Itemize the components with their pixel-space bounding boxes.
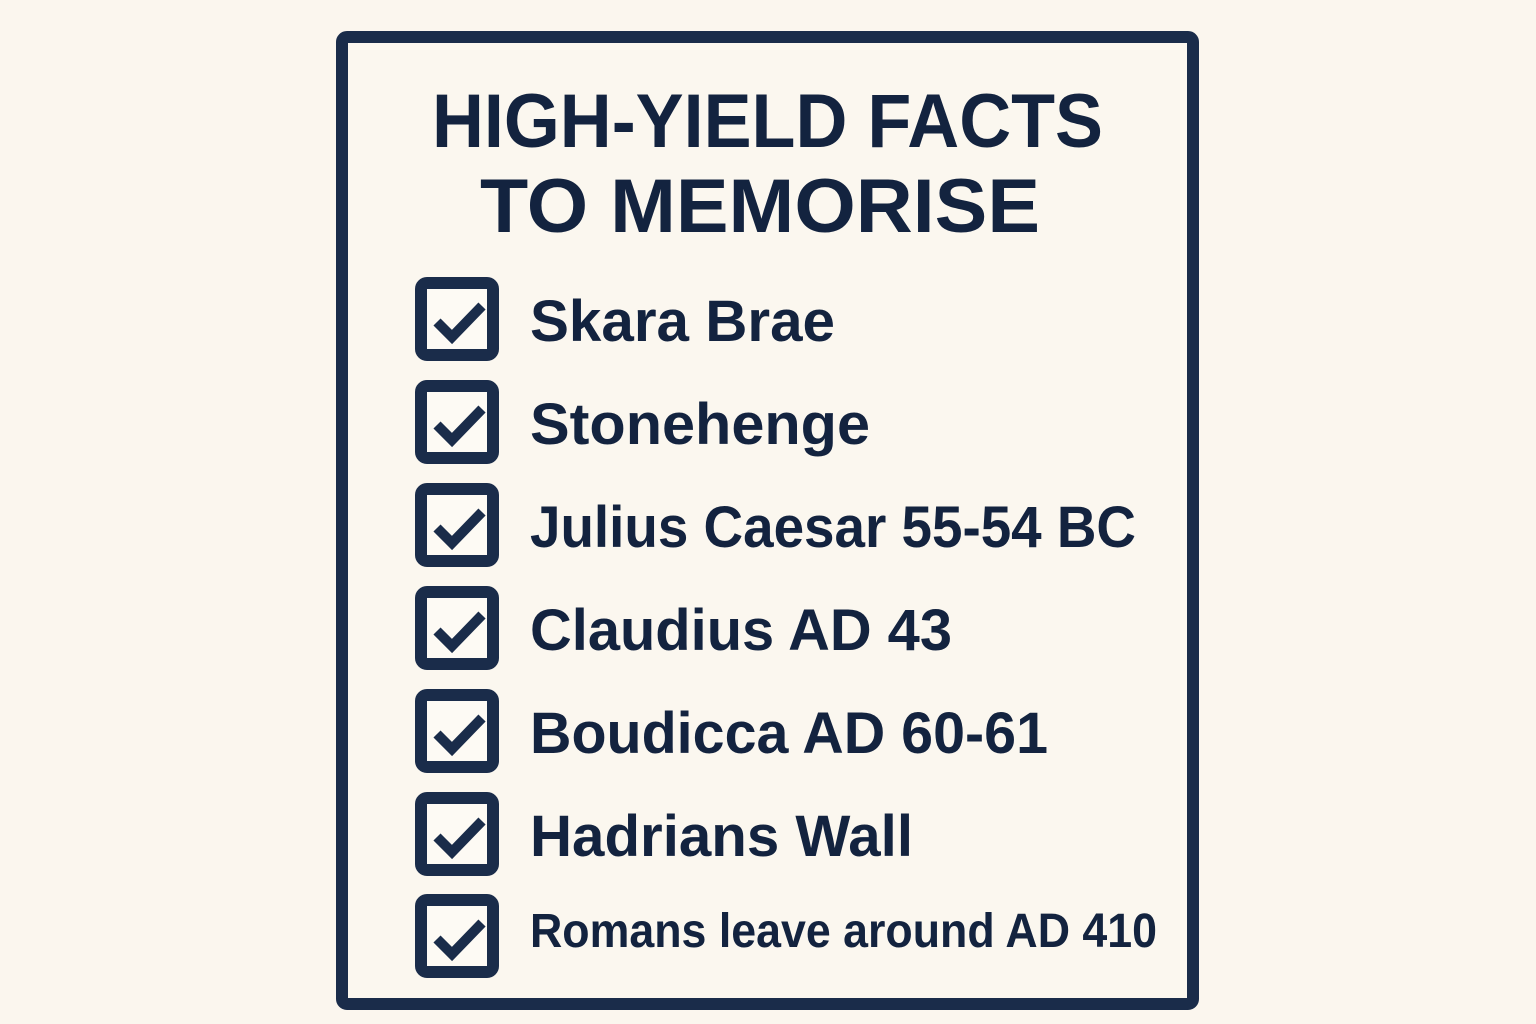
item: Julius Caesar: Julius Caesar 55-54 BC [530, 495, 1136, 560]
item: Boudicca: Boudicca AD 60-61 [530, 701, 1048, 766]
title [432, 79, 1103, 249]
panel: checklist frame [342, 37, 1193, 1004]
item: Stonehenge [421, 386, 870, 458]
item: Hadrians Wall [421, 798, 913, 870]
item: Stonehenge: Stonehenge [530, 392, 870, 457]
item: Claudius: Claudius AD 43 [530, 598, 952, 663]
item: Romans leave: Romans leave around AD 410 [530, 905, 1157, 958]
title: TO MEMORISE [480, 164, 1040, 249]
item: Skara Brae: Skara Brae [530, 289, 835, 354]
item: Skara Brae [421, 283, 835, 355]
item: Hadrians Wall: Hadrians Wall [530, 804, 913, 869]
title: HIGH-YIELD FACTS [432, 79, 1103, 164]
item: Romans leave [421, 900, 1157, 972]
